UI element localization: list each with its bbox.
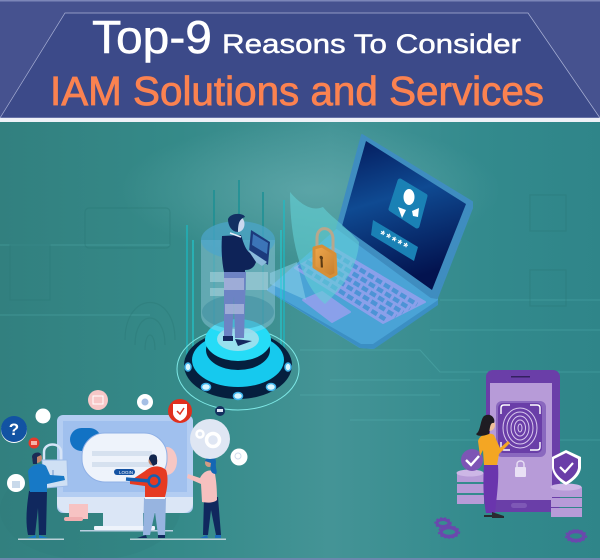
title line one bbox=[92, 11, 521, 63]
icon: translucent shield with padlock bbox=[290, 192, 359, 304]
floor lines bbox=[18, 538, 226, 540]
light projection from cylinder to laptop bbox=[270, 262, 306, 300]
icon: search bbox=[230, 448, 248, 466]
header band bbox=[0, 0, 600, 122]
title trapezoid panel bbox=[0, 13, 600, 118]
shoes bbox=[223, 336, 252, 346]
person woman bbox=[187, 456, 221, 538]
head bbox=[232, 216, 244, 232]
phone body bbox=[486, 370, 560, 512]
woman bbox=[476, 415, 510, 518]
check shield bbox=[552, 450, 581, 485]
collar bbox=[230, 233, 241, 237]
person bbox=[222, 214, 256, 346]
icon: lock badge bbox=[7, 474, 25, 492]
icon: small transfer badge bbox=[215, 406, 225, 416]
user avatar tile bbox=[391, 181, 425, 226]
illustration: laptop with login bbox=[267, 135, 472, 349]
laptop deck bbox=[268, 227, 437, 348]
touchpad bbox=[303, 292, 350, 322]
title line one: Reasons To Consider bbox=[222, 29, 521, 59]
bottom edge line bbox=[0, 558, 600, 560]
podium base bbox=[184, 331, 292, 399]
icon: question mark badge: ? bbox=[9, 420, 19, 439]
teal background bbox=[0, 122, 600, 560]
monitor bbox=[57, 415, 193, 532]
small lock icon bbox=[515, 461, 526, 477]
icon: question mark badge bbox=[1, 416, 27, 443]
padlock body bbox=[314, 246, 336, 277]
podium lights bbox=[185, 363, 291, 400]
torso bbox=[222, 235, 256, 272]
right server stack bbox=[550, 484, 582, 517]
icon: wifi bbox=[36, 408, 50, 424]
illustration: phone fingerprint bbox=[435, 370, 586, 542]
tablet bbox=[247, 230, 270, 266]
title line two: IAM Solutions and Services bbox=[50, 68, 544, 114]
laptop screen bbox=[337, 135, 472, 298]
illustration: team at login monitor bbox=[1, 390, 248, 540]
pink note bbox=[64, 504, 88, 521]
fingerprint panel bbox=[496, 401, 546, 457]
password field bbox=[371, 220, 418, 261]
password field: ***** bbox=[377, 227, 412, 255]
podium ring bbox=[177, 328, 299, 410]
left server stack bbox=[456, 470, 484, 504]
gears bbox=[435, 518, 586, 542]
padlock shackle bbox=[317, 229, 333, 252]
login card bbox=[82, 433, 167, 482]
blue pill bbox=[70, 428, 101, 451]
light beams bbox=[187, 180, 284, 372]
person with key bbox=[126, 454, 168, 538]
icon: red shield badge bbox=[168, 399, 192, 423]
padlock bbox=[42, 444, 68, 488]
icon: red chip bbox=[28, 438, 40, 448]
key bbox=[126, 479, 150, 481]
illustration: person on hologram podium bbox=[177, 180, 299, 410]
icon: mail bbox=[88, 390, 108, 410]
login card: LOGIN bbox=[119, 470, 133, 475]
hologram cylinder bbox=[201, 221, 275, 334]
title line one: Top-9 bbox=[92, 11, 212, 63]
keyboard bbox=[295, 247, 425, 323]
white divider stripe bbox=[0, 118, 600, 122]
icon: globe bbox=[137, 394, 153, 410]
check circle bbox=[461, 449, 483, 471]
legs bbox=[224, 272, 246, 338]
podium tier bbox=[206, 330, 270, 370]
icon: gears bbox=[190, 419, 230, 459]
person with padlock bbox=[26, 453, 65, 538]
pink blob bbox=[157, 447, 177, 475]
